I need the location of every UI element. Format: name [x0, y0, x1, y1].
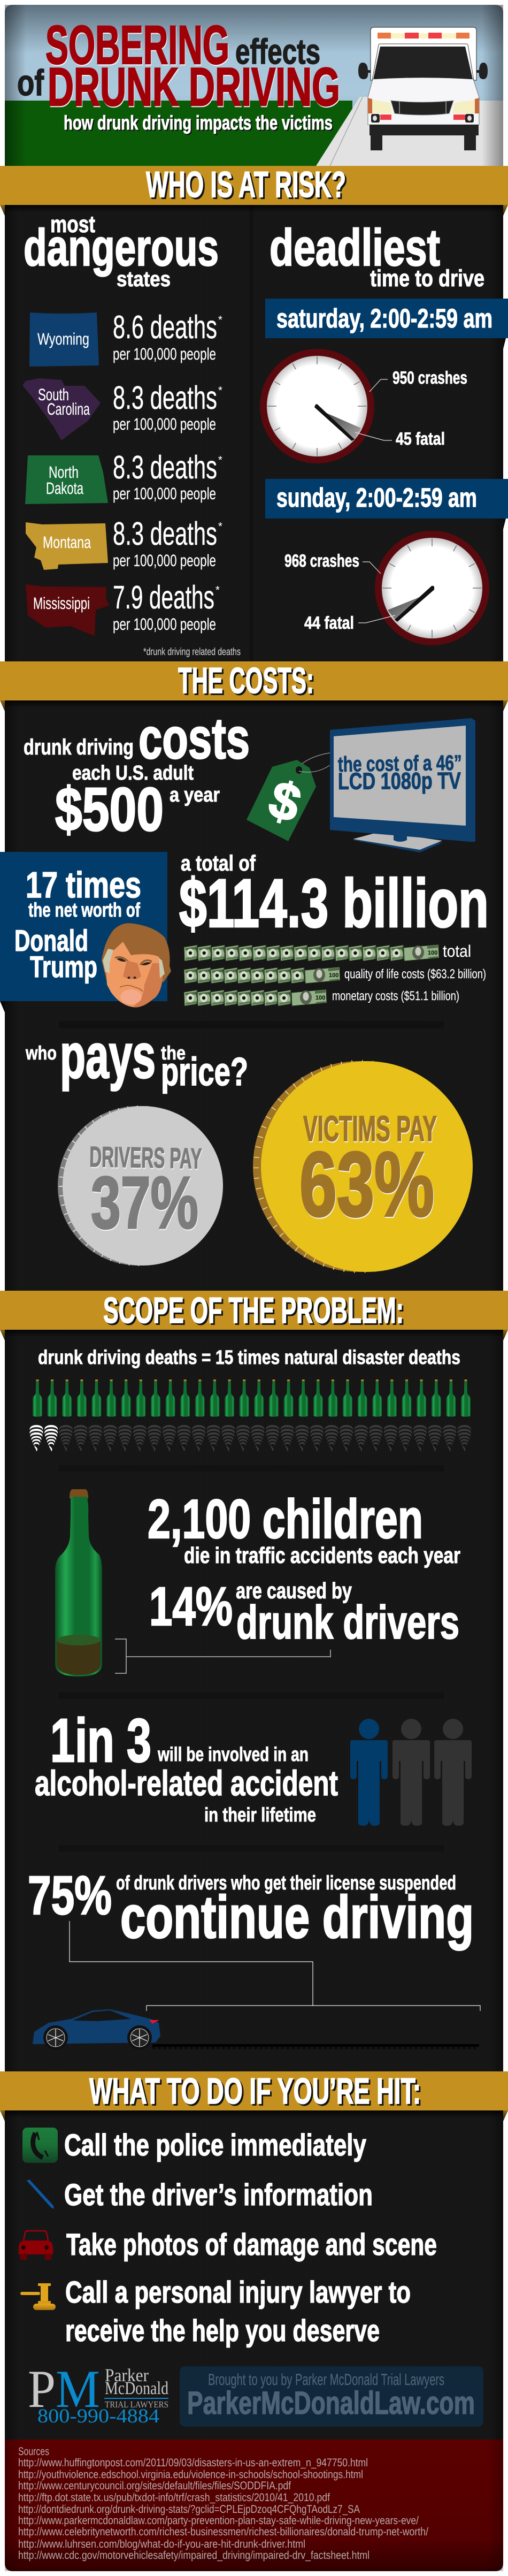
state: Wyoming: per 100,000 people: [113, 345, 216, 363]
panel: sources: http://ftp.dot.state.tx.us/pub/txdot-info/trf/crash_statistics/2010/41_2010.pdf: [18, 2491, 330, 2504]
state: North Dakota: per 100,000 people: [113, 484, 216, 503]
heading: most dangerous states: most: [50, 211, 95, 238]
state: South Carolina: [22, 378, 222, 440]
callout: Donald Trump: Donald: [14, 924, 88, 957]
logo: Parker McDonald: Parker: [105, 2366, 149, 2386]
panel: sources: http://www.parkermcdonaldlaw.com/party-prevention-plan-stay-safe-while-driving-new-years-eve/: [18, 2514, 419, 2527]
clock: saturday: 950 crashes: [392, 368, 467, 387]
step: call the police: Call the police immediately: [64, 2128, 366, 2162]
money row: total: total: [443, 942, 471, 961]
state: North Dakota: *: [218, 454, 222, 466]
state: Montana: *: [218, 521, 222, 532]
heading: who pays the price: pays: [60, 1021, 156, 1092]
text: 75% continue driving: 75%: [28, 1865, 112, 1926]
text: 75% continue driving: [28, 1865, 474, 1950]
heading: deadliest time to drive: time to drive: [370, 265, 484, 292]
callout: Donald Trump: [0, 852, 171, 1012]
money row: monetary: monetary costs ($51.1 billion): [332, 989, 459, 1003]
road: [316, 97, 503, 166]
step: driver's information: Get the driver’s information: [64, 2178, 373, 2212]
text: drunk driving costs each U.S. adult $500 a year: a year: [170, 784, 220, 806]
coin: victims pay: [253, 1061, 473, 1272]
title: DRUNK DRIVING: [48, 57, 340, 117]
logo: Parker McDonald: [28, 2359, 168, 2427]
heading: most dangerous states: [24, 211, 219, 291]
icons: row of 30 tornadoes: [30, 1426, 471, 1451]
icon: large bottle: [55, 1489, 102, 1676]
coin: drivers pay: DRIVERS PAY: [89, 1141, 202, 1175]
money row: total: [184, 942, 471, 961]
panel: sources: http://dontdiedrunk.org/drunk-driving-stats/?gclid=CPLEjpDzoq4CFQhgTAodLz7_SA: [18, 2503, 360, 2516]
step: call a lawyer: Call a personal injury lawyer to: [65, 2275, 411, 2310]
panel: sources: [5, 2440, 503, 2571]
state: Mississippi: *: [215, 584, 220, 596]
ribbon: saturday: [265, 299, 508, 349]
subtitle: how drunk driving impacts the victims: [64, 112, 333, 134]
state: North Dakota: [25, 449, 222, 504]
text: 1 in 3: in their lifetime: [204, 1804, 316, 1826]
money row: quality of life: [184, 967, 486, 984]
text: 1 in 3: will be involved in an: [157, 1743, 309, 1765]
state: Montana: [26, 515, 222, 570]
panel: sources: http://www.cdc.gov/motorvehiclesafety/impaired_driving/impaired-drv_factsheet.html: [18, 2549, 370, 2562]
callout: brought to you by: [180, 2366, 483, 2427]
text: drunk driving costs each U.S. adult $500 a year: [24, 706, 250, 844]
clock: saturday: [260, 349, 467, 463]
banner: who is at risk: [0, 164, 508, 216]
state: Mississippi: [26, 579, 220, 636]
heading: deadliest time to drive: deadliest: [270, 218, 440, 277]
icon: phone: [22, 2128, 58, 2163]
state: Montana: 8.3 deaths: [113, 515, 217, 552]
icon: pen: [27, 2179, 54, 2209]
footnote: *drunk driving related deaths: [143, 646, 241, 658]
state: South Carolina: *: [218, 385, 222, 397]
clock: sunday: 968 crashes: [284, 551, 359, 570]
logo: Parker McDonald: M: [56, 2359, 100, 2419]
text: 14% drunk drivers: are caused by: [236, 1578, 352, 1603]
panel: sources: http://youthviolence.edschool.virginia.edu/violence-in-schools/school-shootings.html: [18, 2468, 363, 2481]
text: 1 in 3: 1in 3: [50, 1706, 151, 1775]
step: call the police: [22, 2128, 366, 2163]
text: 1 in 3: alcohol-related accident: [35, 1763, 338, 1803]
icons: three people: [350, 1719, 472, 1826]
text: total of $114.3 billion: a total of: [181, 851, 256, 875]
bracket connector: [115, 1639, 330, 1673]
callout: Donald Trump: 17 times: [26, 865, 141, 905]
panel: sources: http://www.huffingtonpost.com/2011/09/03/disasters-in-us-an-extrem_n_947750.html: [18, 2457, 368, 2469]
step: call a lawyer: receive the help you deserve: [65, 2314, 380, 2348]
heading: most dangerous states: dangerous: [24, 218, 219, 277]
state: Wyoming: [29, 309, 222, 367]
logo: Parker McDonald: McDonald: [105, 2379, 168, 2398]
icon: ambulance: [358, 27, 488, 150]
text: 1 in 3: [35, 1706, 338, 1826]
text: drunk driving costs each U.S. adult $500 a year: each U.S. adult: [72, 762, 194, 784]
state: Montana: Montana: [43, 533, 91, 552]
banner: scope of the problem: [0, 1290, 508, 1340]
icon: television: [330, 718, 475, 852]
connector lines: [70, 1921, 480, 2011]
state: South Carolina: per 100,000 people: [113, 415, 216, 433]
step: call a lawyer: [20, 2275, 411, 2348]
panel: sources: Sources: [18, 2445, 49, 2458]
state: North Dakota: 8.3 deaths: [113, 449, 217, 485]
icon: television: LCD 1080p TV: [338, 768, 461, 795]
state: South Carolina: South: [38, 385, 69, 404]
state: South Carolina: Carolina: [47, 400, 90, 418]
state: Montana: per 100,000 people: [113, 551, 216, 570]
panel: sources: http://www.celebritynetworth.com/richest-businessmen/richest-billionaires/donald-trump-net-worth/: [18, 2526, 428, 2538]
icon: price tag: $: [263, 769, 307, 834]
coin: victims pay: 63%: [299, 1133, 434, 1236]
text: drunk driving costs each U.S. adult $500 a year: drunk driving: [24, 735, 134, 759]
icons: row of 30 bottles: [33, 1380, 471, 1417]
title: [17, 14, 340, 117]
icon: television: the cost of a 46”: [338, 751, 462, 776]
grass: [5, 101, 352, 166]
state: Wyoming: Wyoming: [37, 330, 89, 348]
icon: Trump face: [102, 923, 171, 1007]
icon: blue car: [33, 2009, 160, 2050]
clock: saturday: 45 fatal: [396, 429, 445, 448]
banner: the costs: [0, 660, 508, 711]
state: North Dakota: Dakota: [46, 479, 84, 498]
state: Mississippi: per 100,000 people: [113, 615, 216, 634]
state: Mississippi: 7.9 deaths: [113, 579, 214, 615]
text: 14% drunk drivers: 14%: [149, 1576, 233, 1637]
logo: Parker McDonald: P: [28, 2359, 56, 2419]
logo: Parker McDonald: 800-990-4884: [37, 2405, 159, 2427]
banner: what to do if you're hit: [0, 2071, 508, 2121]
ribbon: sunday: [265, 479, 508, 529]
title: effects: [235, 32, 320, 71]
heading: who pays the price: price?: [161, 1049, 248, 1094]
banner: who is at risk: WHO IS AT RISK?: [146, 164, 346, 205]
text: drunk driving costs each U.S. adult $500 a year: costs: [138, 706, 250, 771]
coin: drivers pay: 37%: [91, 1162, 198, 1244]
clock: sunday: 44 fatal: [304, 613, 354, 632]
text: 2,100 children: [148, 1488, 460, 1568]
state: North Dakota: North: [49, 463, 79, 482]
icon: red car: [19, 2231, 53, 2260]
heading: who pays the price: [25, 1021, 248, 1094]
state: Wyoming: *: [218, 314, 222, 326]
state: Wyoming: 8.6 deaths: [113, 309, 217, 345]
text: drunk driving costs each U.S. adult $500 a year: $500: [55, 775, 164, 844]
heading: who pays the price: who: [25, 1042, 57, 1064]
callout: Donald Trump: Trump: [30, 950, 97, 984]
logo: Parker McDonald: TRIAL LAWYERS: [105, 2399, 168, 2410]
heading: who pays the price: the: [161, 1042, 186, 1064]
title: SOBERING: [45, 14, 229, 75]
heading: most dangerous states: states: [117, 268, 171, 291]
money row: monetary: [184, 989, 459, 1006]
state: South Carolina: 8.3 deaths: [113, 379, 217, 416]
icon: price tag: [247, 753, 330, 841]
title: of: [17, 63, 44, 103]
panel: sources: http://www.luhrsen.com/blog/what-do-if-you-are-hit-drunk-driver.html: [18, 2538, 305, 2550]
banner: the costs: THE COSTS:: [178, 660, 314, 701]
text: 14% drunk drivers: [149, 1576, 459, 1649]
callout: Donald Trump: the net worth of: [28, 899, 141, 921]
coin: drivers pay: [58, 1106, 223, 1266]
text: 2,100 children: 2,100 children: [148, 1488, 423, 1550]
road skid: [152, 2044, 479, 2048]
icon: gavel: [20, 2283, 56, 2310]
panel: sources: http://www.centurycouncil.org/sites/default/files/files/SODDFIA.pdf: [18, 2480, 291, 2492]
panel: header scene: [5, 5, 503, 166]
state: Mississippi: Mississippi: [33, 594, 90, 613]
clock: sunday: [284, 531, 489, 645]
